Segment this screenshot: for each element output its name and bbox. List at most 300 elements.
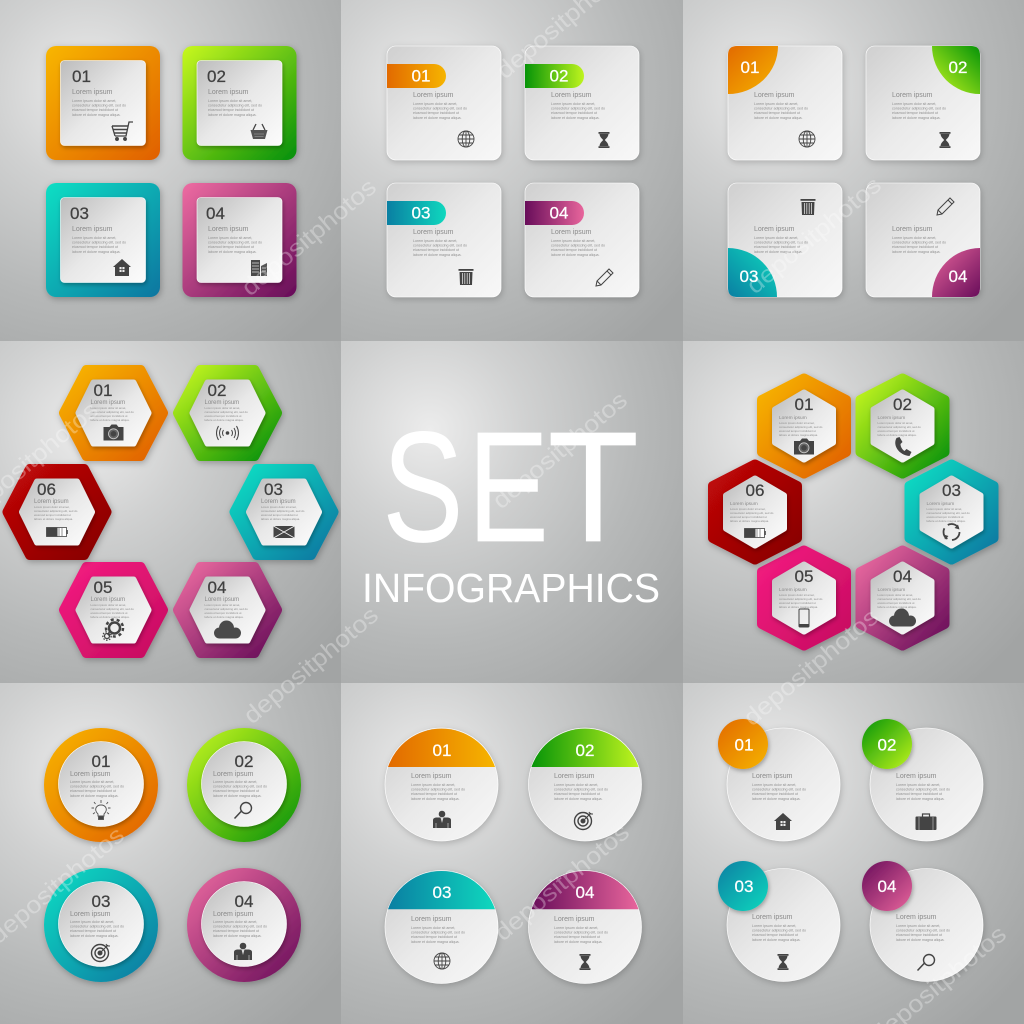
item 03: 03	[412, 204, 430, 222]
item 02: Lorem ipsum	[892, 92, 933, 99]
hexagon 04	[860, 550, 944, 646]
hexagon 02: consectetur adipiscing elit, sed do	[204, 410, 248, 414]
circle 01	[385, 728, 498, 841]
circle 03: eiusmod tempor incididunt ut	[752, 933, 798, 937]
hexagon 05: 05	[795, 567, 813, 586]
item 02: labore et dolore magna aliqua.	[208, 113, 257, 117]
hexagon 05: Lorem ipsum	[779, 587, 807, 593]
item 03: 03	[740, 267, 758, 286]
icon: envelope	[274, 526, 294, 538]
item 04: Lorem ipsum dolor sit amet,	[208, 236, 252, 240]
item 04: 04	[206, 204, 225, 223]
circle 02: consectetur adipiscing elit, sed do	[896, 788, 950, 792]
item 03: labore et dolore magna aliqua.	[754, 250, 803, 254]
item 01: eiusmod tempor incididunt ut	[72, 108, 118, 112]
title: SET: S	[383, 399, 463, 575]
hexagon 03: consectetur adipiscing elit, sed do	[926, 511, 970, 515]
icon: globe	[799, 131, 815, 147]
circle 02: eiusmod tempor incididunt ut	[213, 789, 259, 793]
icon: gears	[103, 620, 123, 640]
icon: hourglass	[778, 954, 788, 970]
circle 04: Lorem ipsum dolor sit amet,	[554, 926, 598, 930]
hexagon 05: consectetur adipiscing elit, sed do	[90, 607, 134, 611]
icon: hourglass	[598, 132, 610, 148]
circle 03: labore et dolore magna aliqua.	[411, 940, 460, 944]
title: SET: E	[468, 399, 549, 575]
item 01: consectetur adipiscing elit, sed do	[754, 107, 808, 111]
hexagon 03: Lorem ipsum	[261, 499, 296, 505]
item 02: eiusmod tempor incididunt ut	[208, 108, 254, 112]
circle 02	[187, 728, 301, 842]
hexagon 02: labore et dolore magna aliqua.	[204, 418, 244, 422]
circle 01: 01	[92, 752, 110, 771]
circle 03: Lorem ipsum dolor sit amet,	[752, 924, 796, 928]
circle 01	[44, 728, 158, 842]
item 01: Lorem ipsum	[754, 92, 795, 99]
item 01: Lorem ipsum dolor sit amet,	[413, 102, 457, 106]
hexagon 04: Lorem ipsum dolor sit amet,	[878, 593, 913, 597]
hexagon 03: Lorem ipsum	[926, 501, 954, 507]
hexagon 01: Lorem ipsum	[779, 415, 807, 421]
circle 01: eiusmod tempor incididunt ut	[411, 792, 457, 796]
item 03: consectetur adipiscing elit, sed do	[72, 241, 126, 245]
circle 04: labore et dolore magna aliqua.	[554, 940, 603, 944]
hexagon 05: Lorem ipsum dolor sit amet,	[779, 593, 815, 597]
circle 03: 03	[735, 877, 753, 896]
hexagon 04: Lorem ipsum dolor sit amet,	[204, 603, 240, 607]
hexagon 02: 02	[208, 381, 226, 400]
circle 01: eiusmod tempor incididunt ut	[752, 792, 798, 796]
item 01: labore et dolore magna aliqua.	[72, 113, 121, 117]
hexagon 02: 02	[893, 395, 912, 414]
hexagon 02	[860, 378, 944, 474]
hexagon 03: labore et dolore magna aliqua.	[926, 519, 966, 523]
hexagon 01: Lorem ipsum	[90, 400, 125, 406]
item 01: consectetur adipiscing elit, sed do	[72, 104, 126, 108]
circle 01: 01	[433, 741, 451, 760]
circle 01: labore et dolore magna aliqua.	[70, 794, 119, 798]
circle 01: eiusmod tempor incididunt ut	[70, 789, 116, 793]
icon: person	[234, 943, 252, 960]
hexagon 01	[64, 370, 163, 456]
item 02: consectetur adipiscing elit, sed do	[208, 104, 262, 108]
circle 02: Lorem ipsum dolor sit amet,	[896, 783, 940, 787]
item 04	[525, 183, 639, 297]
icon: battery	[46, 528, 68, 536]
circle 03: consectetur adipiscing elit, sed do	[70, 925, 124, 929]
hexagon 04: eiusmod tempor incididunt ut	[878, 601, 915, 605]
circle 02	[862, 719, 983, 841]
circle 02: consectetur adipiscing elit, sed do	[213, 785, 267, 789]
panel: cards with side tabs	[341, 0, 683, 341]
item 03	[46, 183, 160, 297]
circle 01: consectetur adipiscing elit, sed do	[752, 788, 806, 792]
circle 02: labore et dolore magna aliqua.	[213, 794, 262, 798]
icon: globe	[458, 131, 474, 147]
hexagon 01: labore et dolore magna aliqua.	[90, 418, 130, 422]
circle 04: consectetur adipiscing elit, sed do	[554, 931, 608, 935]
icon: hourglass	[580, 954, 590, 970]
hexagon 02: consectetur adipiscing elit, sed do	[878, 425, 921, 429]
item 02: eiusmod tempor incididunt ut	[892, 111, 938, 115]
icon: magnifier	[918, 954, 934, 970]
item 02: consectetur adipiscing elit, sed do	[892, 107, 946, 111]
hexagon 03: eiusmod tempor incididunt ut	[926, 515, 964, 519]
item 01: Lorem ipsum dolor sit amet,	[72, 99, 116, 103]
hexagon 01: consectetur adipiscing elit, sed do	[90, 410, 134, 414]
item 01: consectetur adipiscing elit, sed do	[413, 107, 467, 111]
circle 01: labore et dolore magna aliqua.	[752, 797, 801, 801]
item 04: 04	[550, 204, 568, 222]
hexagon 04: Lorem ipsum	[204, 597, 239, 603]
hexagon 04: consectetur adipiscing elit, sed do	[878, 597, 921, 601]
item 02: Lorem ipsum dolor sit amet,	[551, 102, 595, 106]
icon: battery	[744, 528, 766, 538]
hexagon 06: eiusmod tempor incididunt ut	[34, 513, 71, 517]
circle 04: Lorem ipsum	[554, 916, 595, 923]
item 04: Lorem ipsum	[551, 229, 592, 236]
item 01	[387, 46, 501, 160]
hexagon 04: 04	[208, 578, 226, 597]
circle 03: labore et dolore magna aliqua.	[70, 934, 119, 938]
icon: light bulb	[92, 800, 110, 820]
hexagon 04: 04	[893, 567, 912, 586]
item 02: eiusmod tempor incididunt ut	[551, 111, 597, 115]
panel: cards with coloured corners	[683, 0, 1024, 341]
hexagon 05: eiusmod tempor incididunt ut	[779, 601, 816, 605]
item 04	[182, 183, 296, 297]
item 01	[728, 46, 842, 160]
hexagon 03: eiusmod tempor incididunt ut	[261, 513, 298, 517]
hexagon 05	[64, 567, 163, 653]
hexagon 02: eiusmod tempor incididunt ut	[878, 429, 915, 433]
circle 04: labore et dolore magna aliqua.	[896, 938, 945, 942]
watermark text: depositphotos	[488, 387, 633, 515]
item 03: consectetur adipiscing elit, sed do	[413, 244, 467, 248]
hexagon 03: consectetur adipiscing elit, sed do	[261, 509, 305, 513]
item 03: eiusmod tempor incididunt ut	[754, 245, 800, 249]
hexagon 01: 01	[94, 381, 112, 400]
hexagon 01: eiusmod tempor incididunt ut	[90, 414, 128, 418]
icon: camera	[104, 424, 124, 440]
hexagon 06: labore et dolore magna aliqua.	[730, 519, 769, 523]
circle 04: 04	[878, 877, 896, 896]
circle 01	[718, 719, 840, 841]
circle 02	[528, 728, 642, 841]
hexagon 04: consectetur adipiscing elit, sed do	[204, 607, 248, 611]
circle 04: consectetur adipiscing elit, sed do	[213, 925, 267, 929]
item 03: consectetur adipiscing elit, sed do	[754, 241, 808, 245]
circle 03: eiusmod tempor incididunt ut	[411, 935, 457, 939]
circle 03: 03	[433, 883, 451, 902]
item 03	[387, 183, 501, 297]
circle 03: eiusmod tempor incididunt ut	[70, 929, 116, 933]
hexagon 01: labore et dolore magna aliqua.	[779, 433, 818, 437]
icon: telephone	[895, 437, 912, 456]
item 02: Lorem ipsum dolor sit amet,	[892, 102, 936, 106]
item 03: labore et dolore magna aliqua.	[72, 250, 121, 254]
circle 03: 03	[92, 892, 110, 911]
hexagon 01: Lorem ipsum dolor sit amet,	[779, 421, 815, 425]
item 01: 01	[741, 58, 759, 77]
icon: person	[433, 811, 451, 828]
hexagon 02: Lorem ipsum	[878, 415, 905, 421]
circle 02: Lorem ipsum	[896, 773, 937, 780]
circle 01: consectetur adipiscing elit, sed do	[70, 785, 124, 789]
hexagon 06: Lorem ipsum	[730, 501, 758, 507]
item 03: Lorem ipsum	[754, 226, 795, 233]
circle 04: Lorem ipsum	[896, 914, 937, 921]
circle 04: eiusmod tempor incididunt ut	[554, 935, 600, 939]
item 01: Lorem ipsum	[72, 89, 113, 96]
item 03: Lorem ipsum dolor sit amet,	[72, 236, 116, 240]
hexagon 06: labore et dolore magna aliqua.	[34, 517, 73, 521]
circle 02: 02	[878, 736, 896, 754]
circle 03: Lorem ipsum	[411, 916, 452, 923]
circle 04	[187, 868, 301, 982]
item 02: 02	[949, 58, 967, 77]
hexagon 03: Lorem ipsum dolor sit amet,	[926, 507, 962, 511]
item 03: eiusmod tempor incididunt ut	[413, 248, 459, 252]
hexagon 02: labore et dolore magna aliqua.	[878, 433, 917, 437]
hexagon 05	[762, 550, 846, 646]
icon: hourglass	[940, 132, 950, 148]
item 01	[46, 46, 160, 160]
icon: suitcase	[916, 814, 936, 830]
panel: circles with coloured caps	[341, 683, 683, 1024]
item 04: eiusmod tempor incididunt ut	[551, 248, 597, 252]
item 04: labore et dolore magna aliqua.	[551, 253, 600, 257]
circle 04: Lorem ipsum	[213, 911, 254, 918]
item 02: labore et dolore magna aliqua.	[551, 116, 600, 120]
icon: refresh cycle	[944, 524, 960, 540]
circle 04: eiusmod tempor incididunt ut	[896, 933, 942, 937]
item 03	[728, 183, 842, 297]
watermark text: depositphotos	[739, 604, 884, 732]
hexagon 06: 06	[746, 481, 764, 500]
item 02	[182, 46, 296, 160]
icon: trash can	[800, 199, 816, 215]
circle 01: consectetur adipiscing elit, sed do	[411, 788, 465, 792]
item 01: Lorem ipsum	[413, 92, 454, 99]
circle 04: Lorem ipsum dolor sit amet,	[213, 920, 257, 924]
circle 04: 04	[235, 892, 253, 911]
icon: basket	[250, 124, 268, 139]
item 03: 03	[70, 204, 89, 223]
item 02: Lorem ipsum	[551, 92, 592, 99]
icon: globe	[434, 953, 450, 969]
watermark text: depositphotos	[742, 172, 887, 300]
hexagon 03: labore et dolore magna aliqua.	[261, 517, 300, 521]
circle 04	[862, 861, 983, 982]
hexagon 04: eiusmod tempor incididunt ut	[204, 611, 242, 615]
hexagon 02: eiusmod tempor incididunt ut	[204, 414, 242, 418]
circle 02: consectetur adipiscing elit, sed do	[554, 788, 608, 792]
circle 04	[528, 870, 642, 984]
hexagon 05: labore et dolore magna aliqua.	[779, 605, 818, 609]
item 04	[866, 183, 980, 297]
icon: smartphone	[799, 609, 809, 627]
icon: target	[574, 812, 593, 830]
item 01: eiusmod tempor incididunt ut	[754, 111, 800, 115]
circle 01: Lorem ipsum	[70, 771, 111, 778]
circle 02: Lorem ipsum dolor sit amet,	[554, 783, 598, 787]
panel: title	[341, 341, 683, 683]
hexagon 06: eiusmod tempor incididunt ut	[730, 515, 767, 519]
hexagon 06: Lorem ipsum dolor sit amet,	[34, 505, 70, 509]
hexagon 03: 03	[264, 480, 283, 499]
circle 04: 04	[576, 883, 594, 902]
hexagon 01: consectetur adipiscing elit, sed do	[779, 425, 823, 429]
item 03: Lorem ipsum dolor sit amet,	[413, 239, 457, 243]
item 04: Lorem ipsum dolor sit amet,	[551, 239, 595, 243]
circle 02: eiusmod tempor incididunt ut	[896, 792, 942, 796]
icon: wireless signal	[216, 426, 238, 440]
panel: rounded square frames	[0, 0, 341, 341]
circle 03: consectetur adipiscing elit, sed do	[752, 929, 806, 933]
item 01: 01	[72, 67, 91, 86]
panel: pointy-top hexagon ring	[683, 341, 1024, 683]
icon: target	[92, 944, 110, 962]
title: SET: T	[548, 400, 639, 575]
item 03: labore et dolore magna aliqua.	[413, 253, 462, 257]
panel: flat-top hexagon ring	[0, 341, 341, 683]
circle 01: Lorem ipsum	[411, 773, 452, 780]
circle 03: labore et dolore magna aliqua.	[752, 938, 801, 942]
item 03: Lorem ipsum	[72, 226, 113, 233]
item 02	[525, 46, 639, 160]
item 03: Lorem ipsum	[413, 229, 454, 236]
hexagon 05: Lorem ipsum dolor sit amet,	[90, 603, 126, 607]
icon: pencil	[596, 269, 613, 286]
panel: circles with number badges	[683, 683, 1024, 1024]
item 01: labore et dolore magna aliqua.	[413, 116, 462, 120]
watermark text: depositphotos	[239, 602, 384, 730]
hexagon 06: Lorem ipsum	[34, 499, 69, 505]
icon: cloud	[889, 608, 916, 626]
hexagon 02: Lorem ipsum dolor sit amet,	[878, 421, 913, 425]
hexagon 03	[910, 464, 994, 560]
hexagon 04: labore et dolore magna aliqua.	[204, 615, 244, 619]
item 03: Lorem ipsum dolor sit amet,	[754, 236, 798, 240]
item 04: labore et dolore magna aliqua.	[892, 250, 941, 254]
item 04: Lorem ipsum dolor sit amet,	[892, 236, 936, 240]
item 04: Lorem ipsum	[892, 226, 933, 233]
item 04: 04	[949, 267, 967, 286]
icon: pencil	[937, 198, 954, 215]
icon: house	[113, 259, 131, 276]
circle 03: Lorem ipsum	[752, 914, 793, 921]
panel: ring circles	[0, 683, 341, 1024]
hexagon 05: labore et dolore magna aliqua.	[90, 615, 130, 619]
item 04: consectetur adipiscing elit, sed do	[892, 241, 946, 245]
item 02: labore et dolore magna aliqua.	[892, 116, 941, 120]
circle 03	[385, 870, 498, 984]
icon: cloud	[214, 620, 241, 638]
item 01: Lorem ipsum dolor sit amet,	[754, 102, 798, 106]
hexagon 01: Lorem ipsum dolor sit amet,	[90, 406, 126, 410]
circle 04: consectetur adipiscing elit, sed do	[896, 929, 950, 933]
item 04: labore et dolore magna aliqua.	[208, 250, 257, 254]
watermark text: depositphotos	[490, 819, 635, 947]
circle 01: Lorem ipsum dolor sit amet,	[70, 780, 114, 784]
hexagon 02: Lorem ipsum	[204, 400, 239, 406]
item 04: Lorem ipsum	[208, 226, 249, 233]
item 02: 02	[550, 66, 568, 86]
hexagon 01	[762, 378, 846, 474]
icon: trash can	[458, 269, 474, 285]
item 02: Lorem ipsum	[208, 89, 249, 96]
circle 02: Lorem ipsum	[554, 773, 595, 780]
hexagon 03: 03	[942, 481, 961, 500]
hexagon 06	[8, 469, 106, 555]
hexagon 03	[234, 469, 334, 555]
hexagon 04: Lorem ipsum	[878, 587, 905, 593]
item 03: eiusmod tempor incididunt ut	[72, 245, 118, 249]
icon: magnifier	[234, 802, 252, 818]
circle 03	[44, 868, 158, 982]
circle 04: labore et dolore magna aliqua.	[213, 934, 262, 938]
item 04: eiusmod tempor incididunt ut	[892, 245, 938, 249]
item 01: labore et dolore magna aliqua.	[754, 116, 803, 120]
circle 01: 01	[735, 736, 753, 754]
circle 02: eiusmod tempor incididunt ut	[554, 792, 600, 796]
circle 03: consectetur adipiscing elit, sed do	[411, 931, 465, 935]
hexagon 02: Lorem ipsum dolor sit amet,	[204, 406, 240, 410]
circle 03: Lorem ipsum dolor sit amet,	[70, 920, 114, 924]
circle 01: Lorem ipsum dolor sit amet,	[411, 783, 455, 787]
hexagon 06: consectetur adipiscing elit, sed do	[730, 511, 774, 515]
hexagon 06: consectetur adipiscing elit, sed do	[34, 509, 78, 513]
hexagon 04	[178, 567, 277, 653]
item 04: eiusmod tempor incididunt ut	[208, 245, 254, 249]
item 01: eiusmod tempor incididunt ut	[413, 111, 459, 115]
circle 02: Lorem ipsum dolor sit amet,	[213, 780, 257, 784]
icon: house	[774, 813, 792, 830]
circle 02: 02	[235, 752, 253, 771]
circle 02: Lorem ipsum	[213, 771, 254, 778]
hexagon 04: labore et dolore magna aliqua.	[878, 605, 917, 609]
item 04: consectetur adipiscing elit, sed do	[551, 244, 605, 248]
item 02: consectetur adipiscing elit, sed do	[551, 107, 605, 111]
circle 03: Lorem ipsum	[70, 911, 111, 918]
icon: camera	[794, 438, 814, 454]
title: SET	[383, 399, 639, 575]
hexagon 02	[178, 370, 277, 456]
hexagon 05: Lorem ipsum	[90, 597, 125, 603]
watermark text: depositphotos	[237, 174, 382, 302]
circle 01: Lorem ipsum dolor sit amet,	[752, 783, 796, 787]
circle 03	[718, 861, 840, 982]
circle 02: labore et dolore magna aliqua.	[554, 797, 603, 801]
circle 03: Lorem ipsum dolor sit amet,	[411, 926, 455, 930]
circle 02: 02	[576, 741, 594, 760]
hexagon 03: Lorem ipsum dolor sit amet,	[261, 505, 297, 509]
hexagon 05: 05	[94, 578, 112, 597]
hexagon 06: 06	[37, 480, 56, 499]
hexagon 05: eiusmod tempor incididunt ut	[90, 611, 128, 615]
item 02	[866, 46, 980, 160]
hexagon 01: 01	[795, 395, 813, 414]
hexagon 06: Lorem ipsum dolor sit amet,	[730, 507, 766, 511]
icon: shopping cart	[112, 122, 133, 140]
hexagon 05: consectetur adipiscing elit, sed do	[779, 597, 823, 601]
item 02: 02	[207, 67, 226, 86]
circle 01: labore et dolore magna aliqua.	[411, 797, 460, 801]
hexagon 01: eiusmod tempor incididunt ut	[779, 429, 816, 433]
hexagon 06	[713, 464, 797, 560]
circle 04: Lorem ipsum dolor sit amet,	[896, 924, 940, 928]
